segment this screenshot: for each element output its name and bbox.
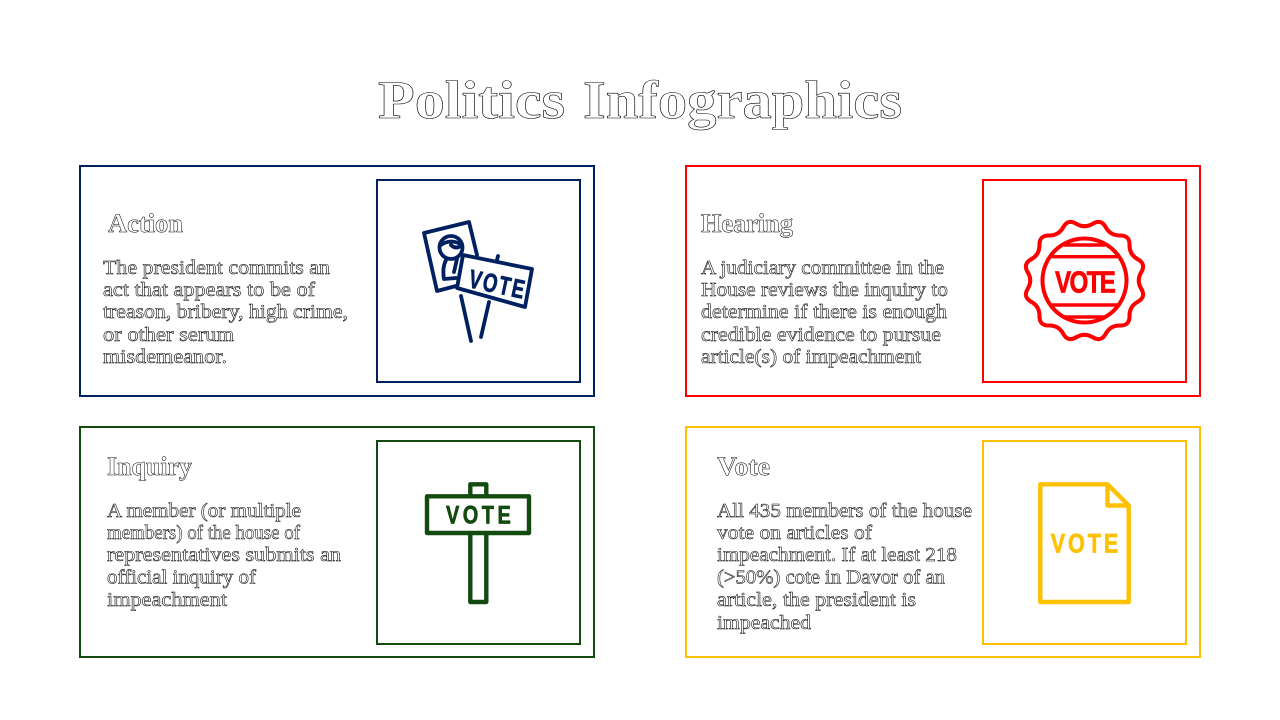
icon frame: hearing bbox=[983, 180, 1186, 382]
text block: action: treason, bribery, high crime, bbox=[103, 301, 348, 323]
panel border: hearing bbox=[686, 166, 1200, 396]
text block: inquiry: impeachment bbox=[107, 589, 227, 611]
text block: hearing: A judiciary committee in the bbox=[701, 257, 944, 279]
text block: hearing: House reviews the inquiry to bbox=[701, 279, 948, 301]
text block: hearing: determine if there is enough bbox=[701, 301, 947, 323]
text block: vote: article, the president is bbox=[717, 589, 916, 611]
heading: action: Action bbox=[108, 209, 184, 238]
panel border: inquiry bbox=[80, 427, 594, 657]
text block: action bbox=[103, 257, 348, 368]
panel: hearing bbox=[686, 166, 1200, 396]
icon: campaign signs bbox=[424, 222, 532, 341]
text block: inquiry: representatives submits an bbox=[107, 544, 341, 566]
text block: vote: All 435 members of the house bbox=[717, 500, 972, 522]
heading: inquiry: Inquiry bbox=[107, 452, 192, 481]
text block: inquiry: official inquiry of bbox=[107, 566, 256, 588]
text block: hearing: credible evidence to pursue bbox=[701, 324, 941, 346]
text block: vote: impeachment. If at least 218 bbox=[717, 544, 957, 566]
text block: vote: impeached bbox=[717, 612, 811, 634]
panel border: action bbox=[80, 166, 594, 396]
text block: hearing: article(s) of impeachment bbox=[701, 346, 921, 368]
text block: action: act that appears to be of bbox=[103, 279, 315, 301]
icon: vote signpost: VOTE bbox=[446, 501, 511, 529]
panel: action bbox=[80, 166, 594, 396]
text block: vote: (>50%) cote in Davor of an bbox=[717, 566, 945, 588]
icon: vote document: VOTE bbox=[1051, 529, 1118, 559]
title: Politics bbox=[378, 70, 565, 130]
title: Infographics bbox=[583, 70, 902, 130]
icon: vote badge: VOTE bbox=[1055, 265, 1116, 299]
icon: vote badge bbox=[1006, 202, 1163, 359]
text block: inquiry: A member (or multiple bbox=[107, 500, 301, 522]
icon frame: action bbox=[377, 180, 580, 382]
text block: inquiry: members) of the house of bbox=[107, 522, 300, 544]
icon: vote document bbox=[1040, 484, 1129, 602]
heading: vote: Vote bbox=[717, 452, 770, 481]
text block: inquiry bbox=[107, 500, 341, 611]
icon frame: vote bbox=[983, 441, 1186, 644]
text block: action: or other serum bbox=[103, 324, 234, 346]
panel: inquiry bbox=[80, 427, 594, 657]
icon: vote signpost bbox=[427, 484, 529, 602]
icon: campaign signs: VOTE bbox=[466, 263, 527, 304]
heading: hearing: Hearing bbox=[701, 209, 793, 238]
text block: vote bbox=[717, 500, 972, 634]
panel: vote bbox=[686, 427, 1200, 657]
text block: action: The president commits an bbox=[103, 257, 330, 279]
panel border: vote bbox=[686, 427, 1200, 657]
text block: vote: vote on articles of bbox=[717, 522, 872, 544]
icon frame: inquiry bbox=[377, 441, 580, 644]
text block: hearing bbox=[701, 257, 948, 368]
text block: action: misdemeanor. bbox=[103, 346, 227, 368]
title bbox=[378, 70, 902, 130]
